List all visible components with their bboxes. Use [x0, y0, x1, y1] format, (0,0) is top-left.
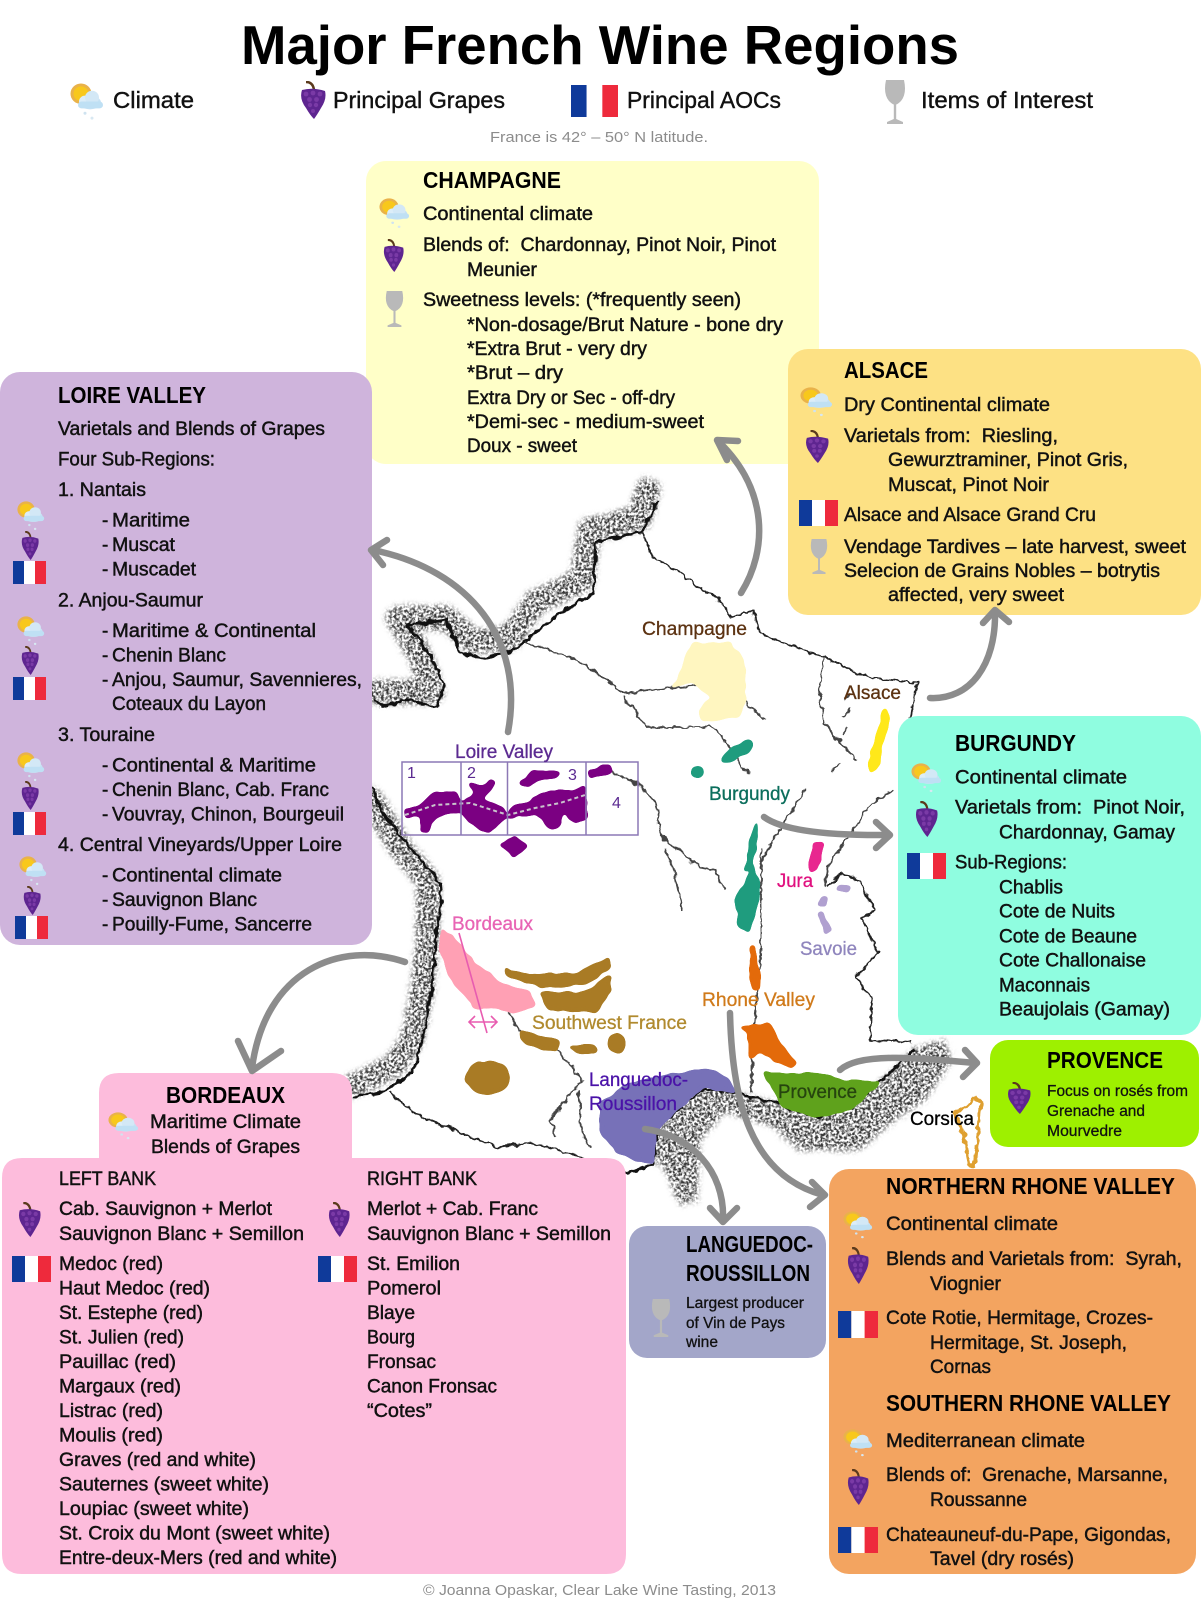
heading: Provence: PROVENCE — [1047, 1047, 1163, 1073]
Loire text: - — [102, 646, 108, 666]
column: right bank: Blaye — [367, 1303, 415, 1324]
Loire text: Coteaux du Layon — [112, 694, 266, 715]
Southern Rhone text: Tavel (dry rosés) — [930, 1549, 1074, 1570]
map labels: 1 — [407, 765, 416, 782]
island: Corsica — [955, 1098, 981, 1165]
Burgundy icons — [907, 763, 946, 879]
Champagne text: Extra Dry or Sec - off-dry — [467, 388, 675, 409]
column: right bank: Pomerol — [367, 1278, 441, 1300]
Champagne text: Blends of: Chardonnay, Pinot Noir, Pinot — [423, 235, 777, 256]
map labels: Burgundy — [709, 784, 790, 805]
arrow: to Loire Valley — [371, 540, 511, 732]
Loire text: Continental climate — [112, 866, 282, 886]
map labels: Corsica — [910, 1109, 974, 1130]
region: Alsace vineyards — [868, 707, 890, 773]
Bordeaux summary: Maritime Climate — [150, 1112, 301, 1133]
Burgundy text: Beaujolais (Gamay) — [999, 1000, 1170, 1021]
wine regions — [403, 643, 890, 1165]
Alsace text: Varietals from: Riesling, — [844, 426, 1058, 447]
Provence text: Mourvedre — [1047, 1123, 1122, 1140]
column: left bank: LEFT BANK — [59, 1169, 156, 1190]
panel: Bordeaux — [2, 1073, 626, 1574]
column: right bank: RIGHT BANK — [367, 1169, 477, 1190]
Burgundy text — [955, 768, 1185, 1021]
Burgundy text: Chablis — [999, 878, 1063, 899]
Loire text: - — [102, 914, 108, 936]
map labels: 3 — [568, 767, 577, 784]
Languedoc text: Largest producer — [686, 1295, 804, 1312]
arrow: to Bordeaux — [238, 955, 405, 1071]
Languedoc text — [685, 1295, 804, 1351]
Champagne text — [423, 204, 784, 457]
Loire text: Muscat — [112, 535, 176, 556]
heading: Languedoc-Roussillon: LANGUEDOC- — [686, 1231, 813, 1257]
column: left bank: Listrac (red) — [59, 1401, 163, 1422]
panel: Provence — [990, 1040, 1199, 1147]
map labels: Southwest France — [532, 1013, 687, 1034]
column: left bank: St. Julien (red) — [59, 1328, 184, 1348]
column: left bank: Cab. Sauvignon + Merlot — [59, 1199, 273, 1220]
Loire text: 1. Nantais — [58, 480, 146, 501]
column: left bank: St. Croix du Mont (sweet white) — [59, 1524, 330, 1544]
panel: Burgundy — [898, 716, 1201, 1035]
Southern Rhone icons — [838, 1429, 878, 1553]
Southern Rhone text: Chateauneuf-du-Pape, Gigondas, — [886, 1525, 1171, 1546]
panel: Champagne — [366, 161, 819, 464]
Champagne text: *Brut – dry — [467, 363, 564, 384]
region: Jura vineyards — [808, 842, 824, 873]
Loire text: Varietals and Blends of Grapes — [58, 419, 325, 440]
Alsace text: affected, very sweet — [888, 585, 1065, 606]
column: right bank: St. Emilion — [367, 1254, 460, 1275]
Loire text — [58, 419, 362, 936]
region: Burgundy vineyards — [691, 737, 761, 933]
Loire text: Sauvignon Blanc — [112, 890, 257, 911]
coastline — [352, 500, 914, 1175]
icon: grapes — [1008, 1083, 1031, 1114]
Loire text: Anjou, Saumur, Savennieres, — [112, 670, 362, 691]
Loire text: Continental & Maritime — [112, 756, 316, 776]
map labels: Rhone Valley — [702, 990, 816, 1011]
Alsace text: Selecion de Grains Nobles – botrytis — [844, 561, 1160, 582]
Alsace text: Vendage Tardives – late harvest, sweet — [844, 537, 1187, 558]
column: right bank: Canon Fronsac — [367, 1376, 497, 1398]
Champagne text: *Non-dosage/Brut Nature - bone dry — [467, 315, 784, 336]
panel: Languedoc-Roussillon — [629, 1226, 826, 1358]
heading: Southern Rhone Valley: SOUTHERN RHONE VALLEY — [886, 1390, 1171, 1416]
column: left bank: Medoc (red) — [59, 1254, 163, 1275]
Burgundy text: Continental climate — [955, 768, 1127, 789]
map of France — [352, 490, 981, 1205]
column: left bank: Entre-deux-Mers (red and white) — [59, 1548, 337, 1569]
map labels: Alsace — [844, 683, 901, 704]
Burgundy text: Cote de Beaune — [999, 927, 1137, 948]
footer credit: © Joanna Opaskar, Clear Lake Wine Tasting, 2013 — [423, 1582, 776, 1599]
Loire icons — [13, 501, 48, 939]
Loire text: 4. Central Vineyards/Upper Loire — [58, 835, 342, 856]
region: Languedoc-Roussillon — [599, 1069, 736, 1165]
heading: Champagne: CHAMPAGNE — [423, 167, 561, 193]
Loire text: Pouilly-Fume, Sancerre — [112, 914, 312, 936]
column: left bank: Margaux (red) — [59, 1376, 181, 1398]
Champagne icons — [379, 198, 409, 327]
borders and rivers — [390, 532, 917, 1158]
map labels: 2 — [467, 765, 476, 782]
map labels: Loire Valley — [455, 742, 553, 763]
legend — [70, 80, 1094, 124]
map labels: Bordeaux — [452, 914, 533, 935]
Northern Rhone text: Viognier — [930, 1274, 1002, 1295]
region: Rhone vineyards — [738, 945, 797, 1068]
column: left bank: Loupiac (sweet white) — [59, 1499, 249, 1520]
Southern Rhone text: Blends of: Grenache, Marsanne, — [886, 1465, 1168, 1486]
arrow: to Alsace — [930, 610, 1009, 698]
panel: Rhone Valley — [829, 1169, 1196, 1574]
title: Major French Wine Regions — [241, 14, 959, 76]
Loire sub-region grid — [402, 762, 638, 835]
heading: Bordeaux: BORDEAUX — [166, 1082, 286, 1108]
column: left bank: Pauillac (red) — [59, 1352, 176, 1373]
Loire text: - — [102, 510, 108, 532]
column: left bank — [12, 1169, 337, 1569]
Loire text: - — [102, 756, 108, 776]
map labels: Savoie — [800, 939, 857, 960]
map labels: Champagne — [642, 619, 747, 640]
sea stipple: coasts — [355, 490, 952, 1205]
Southern Rhone text — [886, 1431, 1171, 1570]
column: left bank: Haut Medoc (red) — [59, 1278, 210, 1300]
Loire text: Maritime — [112, 510, 190, 532]
Northern Rhone icons — [838, 1211, 878, 1338]
Alsace text: Gewurztraminer, Pinot Gris, — [888, 450, 1128, 471]
Loire text: Vouvray, Chinon, Bourgeuil — [112, 804, 344, 826]
region: Provence — [761, 1070, 882, 1117]
icon: wine glass — [885, 80, 905, 124]
panel: Loire Valley — [0, 372, 372, 945]
Northern Rhone text: Hermitage, St. Joseph, — [930, 1333, 1127, 1354]
Alsace icons — [799, 387, 838, 574]
heading: Languedoc-Roussillon: ROUSSILLON — [686, 1260, 810, 1286]
Southern Rhone text: Mediterranean climate — [886, 1431, 1085, 1452]
Burgundy text: Varietals from: Pinot Noir, — [955, 798, 1185, 819]
Northern Rhone text: Cornas — [930, 1357, 991, 1378]
column: left bank: St. Estephe (red) — [59, 1303, 203, 1324]
Southern Rhone text: Roussanne — [930, 1490, 1027, 1511]
arrow: to Burgundy — [764, 817, 890, 848]
Loire text: - — [102, 890, 108, 911]
map labels: Jura — [777, 871, 813, 892]
Loire text: - — [102, 804, 108, 826]
Northern Rhone text: Cote Rotie, Hermitage, Crozes- — [886, 1308, 1153, 1329]
Provence text — [1047, 1083, 1188, 1140]
column: right bank: Merlot + Cab. Franc — [367, 1199, 538, 1220]
Loire text: Muscadet — [112, 560, 197, 580]
Provence text: Focus on rosés from — [1047, 1083, 1188, 1100]
column: right bank: “Cotes” — [367, 1401, 432, 1422]
Loire text: 3. Touraine — [58, 725, 155, 746]
legend label: climate: Climate — [113, 87, 194, 113]
region: Savoie vineyards — [818, 885, 850, 935]
map labels — [407, 619, 974, 1130]
Northern Rhone text: Continental climate — [886, 1214, 1058, 1235]
icon: wine glass — [652, 1299, 670, 1337]
heading: Languedoc-Roussillon — [686, 1231, 813, 1286]
heading: Northern Rhone Valley: NORTHERN RHONE VALLEY — [886, 1173, 1175, 1199]
map labels: Languedoc- — [589, 1070, 688, 1091]
map labels: Roussillon — [589, 1094, 677, 1115]
Bordeaux summary — [108, 1112, 301, 1158]
column: right bank: Fronsac — [367, 1352, 436, 1373]
column: right bank: Sauvignon Blanc + Semillon — [367, 1224, 611, 1245]
Languedoc text: of Vin de Pays — [686, 1315, 785, 1332]
Alsace text: Dry Continental climate — [844, 395, 1050, 416]
Champagne text: Sweetness levels: (*frequently seen) — [423, 290, 741, 311]
icon: grapes — [301, 82, 326, 119]
Champagne text: Meunier — [467, 260, 538, 281]
Bordeaux summary: Blends of Grapes — [151, 1137, 300, 1158]
Loire text: Chenin Blanc, Cab. Franc — [112, 780, 329, 801]
Alsace text: Alsace and Alsace Grand Cru — [844, 505, 1096, 526]
region: Bordeaux vineyards — [439, 930, 534, 1013]
arrow: to Provence — [840, 1050, 977, 1077]
region: Southwest France vineyards — [466, 957, 626, 1095]
Burgundy text: Cote de Nuits — [999, 902, 1115, 923]
icon: climate — [70, 83, 103, 120]
column: right bank: Bourg — [367, 1328, 415, 1348]
Burgundy text: Maconnais — [999, 976, 1090, 997]
column: left bank: Graves (red and white) — [59, 1450, 256, 1471]
column: left bank: Moulis (red) — [59, 1426, 163, 1446]
Languedoc text: wine — [685, 1334, 718, 1351]
column: right bank — [318, 1169, 611, 1422]
column: left bank: Sauternes (sweet white) — [59, 1474, 269, 1496]
heading: Alsace: ALSACE — [844, 357, 928, 383]
Loire river dashes — [405, 795, 585, 815]
map labels: Provence — [778, 1082, 857, 1103]
icon: flag — [571, 85, 618, 117]
Champagne text: *Extra Brut - very dry — [467, 339, 647, 360]
Champagne text: Doux - sweet — [467, 436, 578, 457]
Alsace text: Muscat, Pinot Noir — [888, 475, 1050, 496]
Loire text: - — [102, 866, 108, 886]
legend label: items of interest: Items of Interest — [921, 87, 1094, 113]
arrow: to Languedoc-Roussillon — [645, 1129, 737, 1222]
Provence text: Grenache and — [1047, 1103, 1145, 1120]
region: Champagne area — [672, 643, 746, 722]
Loire text: - — [102, 535, 108, 556]
Alsace text — [844, 395, 1187, 606]
legend label: AOCs: Principal AOCs — [627, 87, 781, 113]
Loire text: Chenin Blanc — [112, 646, 226, 666]
Loire text: Four Sub-Regions: — [58, 450, 215, 470]
Burgundy text: Cote Challonaise — [999, 951, 1146, 972]
Loire text: - — [102, 621, 108, 642]
region: Loire vineyards — [403, 764, 613, 857]
arrow: to Champagne — [717, 440, 759, 593]
heading: Loire Valley: LOIRE VALLEY — [58, 382, 206, 408]
panel: Alsace — [788, 349, 1201, 615]
Bordeaux left and right bank marker — [459, 933, 497, 1033]
map labels: 4 — [612, 795, 621, 812]
heading: Burgundy: BURGUNDY — [955, 730, 1076, 756]
arrow: to Rhone Valley — [730, 1013, 825, 1207]
Champagne text: Continental climate — [423, 204, 593, 225]
Loire text: - — [102, 780, 108, 801]
Northern Rhone text — [886, 1214, 1182, 1378]
Champagne text: *Demi-sec - medium-sweet — [467, 412, 705, 433]
Loire text: 2. Anjou-Saumur — [58, 590, 204, 612]
Burgundy text: Chardonnay, Gamay — [999, 823, 1176, 844]
latitude note: France is 42° – 50° N latitude. — [490, 129, 708, 146]
Northern Rhone text: Blends and Varietals from: Syrah, — [886, 1249, 1182, 1270]
column: left bank: Sauvignon Blanc + Semillon — [59, 1224, 304, 1245]
Loire text: - — [102, 670, 108, 691]
legend label: grapes: Principal Grapes — [333, 87, 505, 113]
Loire text: - — [102, 560, 108, 580]
Burgundy text: Sub-Regions: — [955, 853, 1067, 874]
Loire text: Maritime & Continental — [112, 621, 316, 642]
